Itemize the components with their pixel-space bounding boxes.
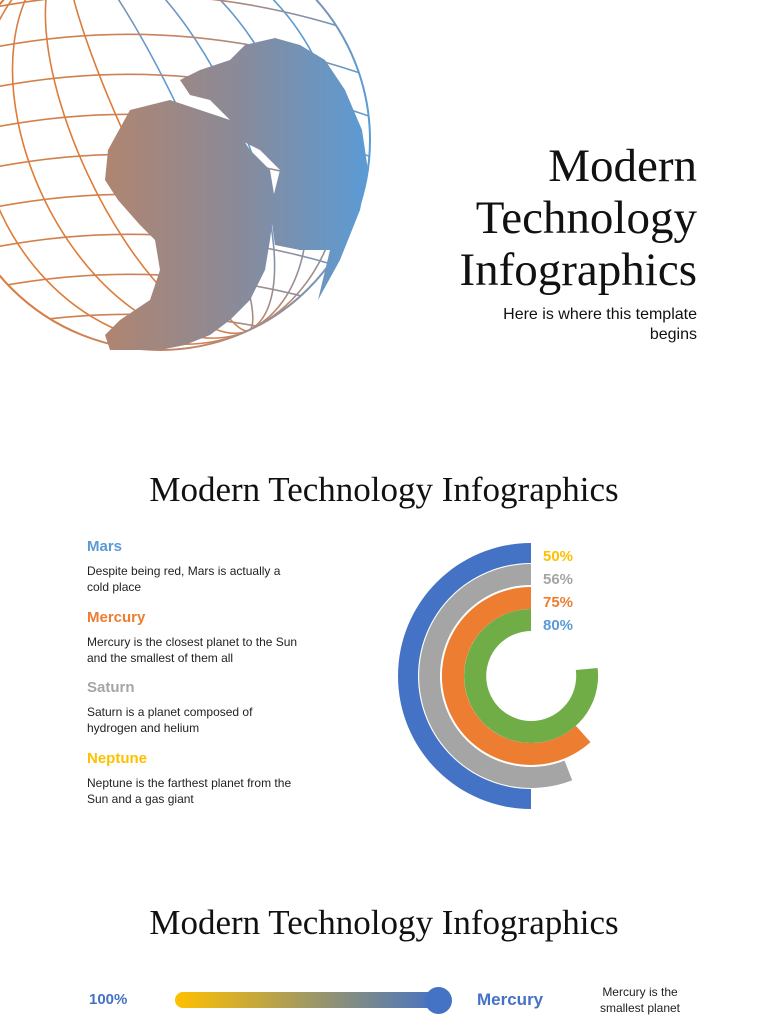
globe illustration xyxy=(0,0,371,351)
subtitle: Here is where this template xyxy=(503,306,697,323)
item: Mars xyxy=(87,538,280,594)
chart percentage labels xyxy=(543,548,573,634)
item: Mars: Despite being red, Mars is actually a cold place xyxy=(87,564,280,594)
chart percentage labels: 80% xyxy=(543,617,573,634)
item: Mercury: Mercury is the closest planet to the Sun and the smallest of them all xyxy=(87,635,297,665)
item: Neptune xyxy=(87,750,291,806)
item: Mercury xyxy=(87,609,297,665)
subtitle: begins xyxy=(650,326,697,343)
item: Saturn: Saturn xyxy=(87,679,135,696)
item: Mars: Mars xyxy=(87,538,122,555)
progress label: Mercury xyxy=(477,990,543,1009)
progress description: Mercury is the smallest planet xyxy=(600,985,680,1015)
progress value: 100% xyxy=(89,991,127,1008)
chart percentage labels: 75% xyxy=(543,594,573,611)
item: Neptune: Neptune xyxy=(87,750,147,767)
subtitle xyxy=(503,306,697,343)
chart percentage labels: 56% xyxy=(543,571,573,588)
chart percentage labels: 50% xyxy=(543,548,573,565)
item: Mercury: Mercury xyxy=(87,609,145,626)
section heading 1: Modern Technology Infographics xyxy=(149,470,619,509)
main title: Modern xyxy=(548,140,697,192)
item: Saturn xyxy=(87,679,252,735)
item: Neptune: Neptune is the farthest planet from the Sun and a gas giant xyxy=(87,776,291,806)
main title xyxy=(459,140,697,296)
legend list xyxy=(87,538,297,806)
section heading 2: Modern Technology Infographics xyxy=(149,903,619,942)
item: Saturn: Saturn is a planet composed of hydrogen and helium xyxy=(87,705,252,735)
main title: Technology xyxy=(476,192,697,244)
main title: Infographics xyxy=(459,244,697,296)
progress bar xyxy=(175,987,452,1014)
